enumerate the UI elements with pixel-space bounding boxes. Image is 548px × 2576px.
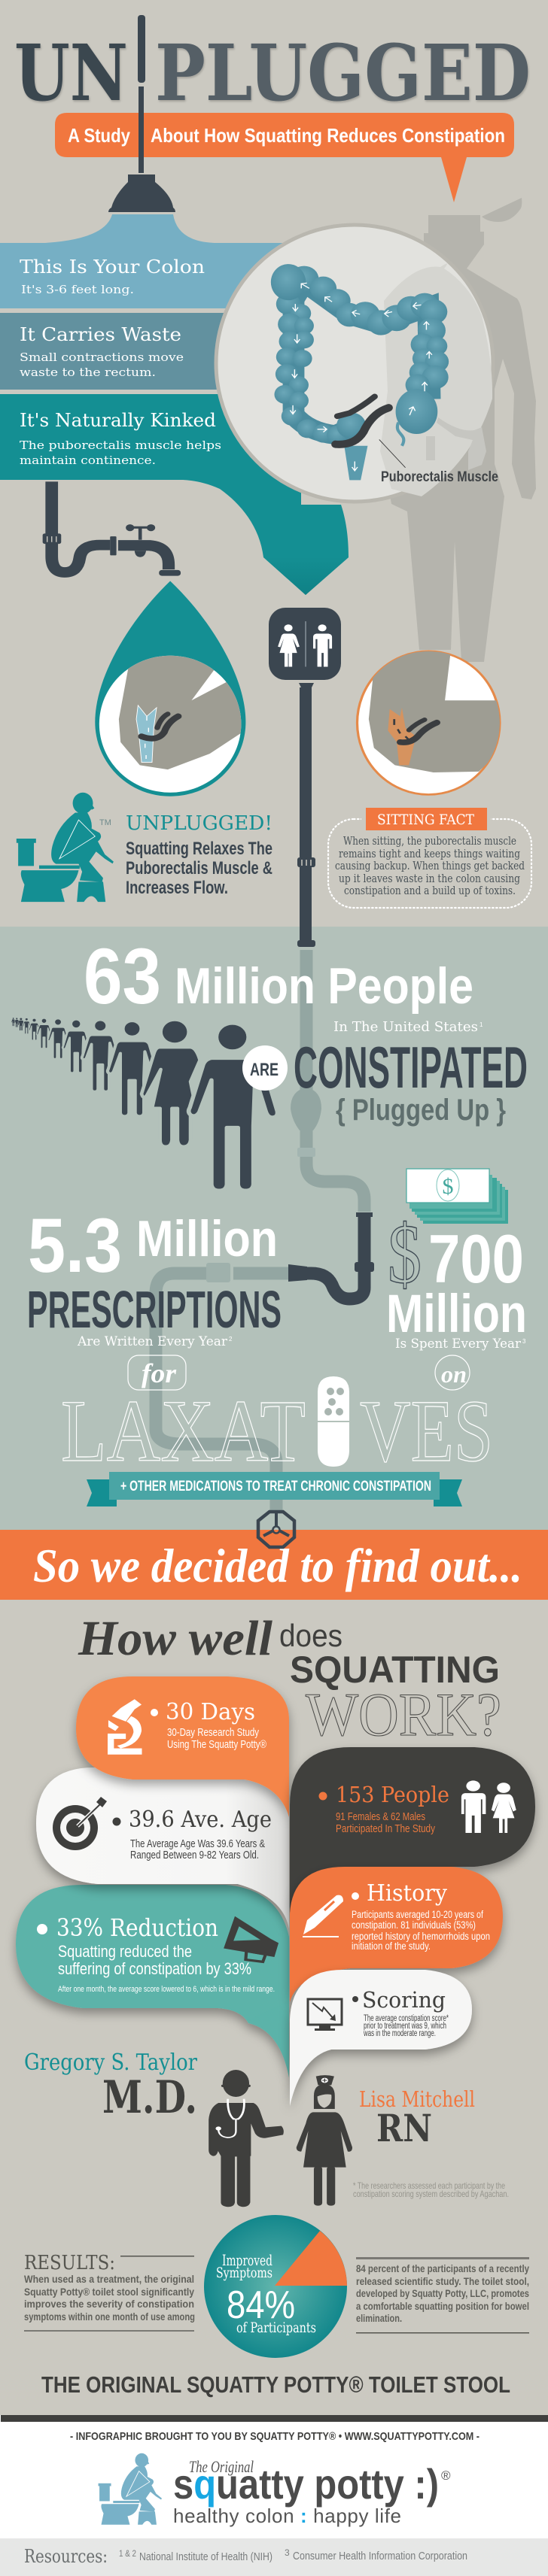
text: 153 people bbox=[336, 1810, 435, 1835]
label: puborectalis muscle: Puborectalis Muscle bbox=[381, 469, 498, 485]
text: average age: The Average Age Was 39.6 Years & bbox=[130, 1838, 265, 1850]
bubble: history bbox=[290, 1867, 503, 2002]
text: contractions: waste to the rectum. bbox=[20, 366, 156, 379]
footnote 2: 2 bbox=[229, 1336, 233, 1343]
text: contractions: Small contractions move bbox=[20, 350, 184, 364]
icon: valve wheel bbox=[258, 1512, 294, 1547]
heading: prescriptions: PRESCRIPTIONS bbox=[27, 1280, 282, 1339]
heading: laxatives: LAXAT bbox=[61, 1382, 306, 1480]
text: scoring bbox=[363, 2014, 449, 2038]
icon: monitor bbox=[308, 1999, 342, 2031]
results: right text bbox=[356, 2257, 529, 2333]
text: scoring: The average constipation score* bbox=[364, 2014, 449, 2023]
banner text: A Study bbox=[68, 124, 130, 147]
text: 153 people: Participated In The Study bbox=[336, 1822, 435, 1835]
pie value: 84 percent: 84% bbox=[227, 2283, 295, 2327]
ribbon: other medications bbox=[87, 1472, 462, 1506]
resources bar: National Institute of Health (NIH) bbox=[139, 2550, 272, 2563]
stat: 63 million people: 63 bbox=[84, 933, 161, 1021]
panel: carries waste bbox=[0, 313, 256, 390]
stat: 63 million people: Million People bbox=[175, 957, 473, 1015]
footer: brought to you by: - INFOGRAPHIC BROUGHT TO YOU BY SQUATTY POTTY® • WWW.SQUATTYPOTTY.COM - bbox=[70, 2430, 480, 2443]
heading: how well does squatting work: WORK? bbox=[306, 1680, 501, 1749]
pie chart: improved symptoms bbox=[204, 2215, 347, 2358]
results: right text: elimination. bbox=[356, 2312, 402, 2324]
pie label: improved symptoms: Symptoms bbox=[216, 2265, 272, 2281]
callout: unplugged bbox=[126, 812, 272, 898]
sitting anatomy circle bbox=[358, 650, 504, 794]
paragraph: sitting fact: up it leaves waste in the colon causing bbox=[339, 873, 520, 885]
icon: stack of money bbox=[406, 1169, 508, 1224]
text: squatting relaxes: Squatting Relaxes The bbox=[126, 839, 272, 859]
heading: how well does squatting work: How well bbox=[78, 1611, 273, 1666]
icon: nurse bbox=[297, 2075, 352, 2206]
resources bar: Consumer Health Information Corporation bbox=[293, 2550, 467, 2562]
logo tagline top: The Original bbox=[189, 2457, 254, 2476]
icon: stack of money: $ bbox=[443, 1174, 453, 1199]
trademark: TM bbox=[99, 818, 111, 827]
paragraph: sitting fact: constipation and a build up of toxins. bbox=[344, 885, 516, 897]
text: colon length: It's 3-6 feet long. bbox=[21, 283, 134, 296]
text: average age: Ranged Between 9-82 Years Old. bbox=[130, 1849, 259, 1861]
heading: sitting fact: SITTING FACT bbox=[377, 812, 474, 828]
pipe: dark trap bbox=[288, 1212, 374, 1299]
bubble: 153 people bbox=[290, 1747, 535, 1913]
icon: plunger bbox=[108, 15, 175, 212]
subtitle banner bbox=[55, 113, 514, 202]
text: 30 days bbox=[167, 1726, 266, 1751]
paragraph: results left: symptoms within one month of use among bbox=[24, 2311, 195, 2323]
resources bar bbox=[0, 2538, 548, 2576]
note: scoring system bbox=[353, 2180, 509, 2199]
panel: naturally kinked with arrow tail bbox=[0, 394, 349, 595]
icon: man and woman bbox=[461, 1780, 516, 1833]
icon: pill bbox=[318, 1376, 349, 1467]
text: plugged up: { Plugged Up } bbox=[336, 1094, 506, 1127]
bubble: average age bbox=[36, 1767, 289, 1928]
text: reduction: Squatting reduced the bbox=[58, 1942, 192, 1961]
icon: doctor bbox=[209, 2070, 284, 2207]
bullet bbox=[151, 1709, 158, 1716]
text: average age bbox=[130, 1838, 265, 1861]
text: reduction: suffering of constipation by 33% bbox=[58, 1959, 251, 1978]
pie label: of participants: of Participants bbox=[236, 2320, 316, 2336]
heading: it carries waste: It Carries Waste bbox=[20, 324, 181, 345]
panel: statistics background bbox=[0, 927, 548, 1530]
source one: 1 & 2 bbox=[119, 2548, 136, 2559]
heading: 153 people: 153 People bbox=[336, 1782, 449, 1807]
text: squatting relaxes: Puborectalis Muscle & bbox=[126, 858, 272, 878]
heading: naturally kinked: It's Naturally Kinked bbox=[20, 410, 216, 431]
bubble: reduction bbox=[16, 1885, 289, 2077]
heading: how well does squatting work: does bbox=[279, 1618, 342, 1653]
callout: are bbox=[242, 1045, 288, 1091]
text: history: initiation of the study. bbox=[352, 1940, 431, 1952]
text: reduction: After one month, the average score lowered to 6, which is in the mild range. bbox=[58, 1985, 275, 1994]
logo slogan: healthy colon : happy life bbox=[173, 2505, 401, 2527]
paragraph: results left: When used as a treatment, the original bbox=[24, 2273, 194, 2285]
title: UN bbox=[14, 28, 128, 119]
stat: 5.3 million prescriptions: 5.3 bbox=[28, 1203, 122, 1288]
text: contractions bbox=[20, 350, 184, 379]
icon: microscope bbox=[108, 1699, 142, 1755]
credit: lisa mitchell: Lisa Mitchell bbox=[359, 2086, 475, 2112]
pipe: faded upper run bbox=[291, 927, 364, 1212]
badge: on: on bbox=[441, 1361, 467, 1388]
text: in the united states: In The United States bbox=[333, 1019, 478, 1035]
credit: gregory taylor: Gregory S. Taylor bbox=[24, 2050, 198, 2076]
colon magnifier circle bbox=[216, 225, 493, 502]
text: reduction bbox=[58, 1942, 275, 1994]
pipe: faded lower run bbox=[156, 1263, 288, 1513]
icon: faucet and trap pipe bbox=[43, 481, 181, 576]
credit: gregory taylor bbox=[24, 2050, 198, 2124]
stat: 5.3 million prescriptions: Million bbox=[136, 1210, 278, 1267]
icon: megaphone bbox=[224, 1916, 279, 1962]
stat: 700 million: $ bbox=[388, 1208, 422, 1301]
heading: history: History bbox=[367, 1880, 447, 1907]
text: history: reported history of hemorrhoids upon bbox=[352, 1931, 490, 1942]
icon: squatting figure on toilet bbox=[17, 793, 114, 902]
icon: target bbox=[53, 1797, 107, 1850]
credit: gregory taylor: M.D. bbox=[102, 2071, 197, 2124]
credit: lisa mitchell: RN bbox=[376, 2106, 432, 2150]
text: is spent: Is Spent Every Year bbox=[395, 1337, 522, 1352]
heading: reduction: 33% Reduction bbox=[56, 1913, 218, 1942]
heading: resources: Resources: bbox=[24, 2546, 108, 2567]
footnote 3: 3 bbox=[522, 1338, 526, 1345]
callout: sitting fact bbox=[328, 805, 531, 908]
paragraph: results left: Squatty Potty® toilet stool significantly bbox=[24, 2286, 194, 2298]
icon: pencil bbox=[303, 1895, 343, 1937]
panel: blue colon heading bbox=[0, 214, 286, 308]
bubble: scoring bbox=[290, 1970, 472, 2106]
heading: laxatives: VES bbox=[360, 1382, 493, 1480]
heading: this is your colon: This Is Your Colon bbox=[20, 256, 205, 278]
paragraph: results left: improves the severity of constipation bbox=[24, 2298, 194, 2310]
heading: average age: 39.6 Ave. Age bbox=[129, 1807, 272, 1833]
heading: scoring: Scoring bbox=[362, 1987, 446, 2013]
callout: unplugged: UNPLUGGED! bbox=[126, 812, 272, 835]
text: scoring: was in the moderate range. bbox=[363, 2029, 436, 2038]
stat: 700 million bbox=[386, 1208, 527, 1352]
paragraph: sitting fact bbox=[335, 836, 525, 897]
results: left text: RESULTS: bbox=[24, 2252, 115, 2274]
heading: how well does squatting work bbox=[78, 1611, 501, 1749]
heading: 30 days: 30 Days bbox=[166, 1699, 255, 1725]
bubble: 30 days bbox=[76, 1676, 289, 1817]
ribbon: other medications: + OTHER MEDICATIONS TO TREAT CHRONIC CONSTIPATION bbox=[120, 1479, 431, 1494]
drop: squatting anatomy bbox=[95, 581, 245, 796]
text: puborectalis: maintain continence. bbox=[20, 454, 156, 467]
footer: white panel bbox=[0, 2415, 548, 2538]
stat: 700 million: 700 bbox=[428, 1221, 524, 1297]
man silhouette bbox=[388, 198, 536, 662]
text: 153 people: 91 Females & 62 Males bbox=[336, 1810, 425, 1823]
bullet bbox=[37, 1924, 47, 1934]
icon: queue of people bbox=[11, 1018, 277, 1191]
logo icon bbox=[99, 2453, 162, 2525]
text: squatting relaxes: Increases Flow. bbox=[126, 878, 228, 898]
text: 30 days: 30-Day Research Study bbox=[167, 1726, 259, 1739]
pie label: improved symptoms bbox=[216, 2251, 272, 2281]
bullet bbox=[352, 1996, 358, 2002]
source two: 3 bbox=[285, 2547, 290, 2558]
restroom sign and pipe bbox=[269, 608, 341, 936]
badge: for bbox=[128, 1355, 186, 1390]
paragraph: results left bbox=[24, 2273, 195, 2323]
heading: how well does squatting work: SQUATTING bbox=[290, 1649, 500, 1691]
callout: are: ARE bbox=[250, 1060, 279, 1080]
colon illustration bbox=[271, 264, 449, 480]
stat: 5.3 million prescriptions bbox=[27, 1203, 282, 1349]
registered mark: ® bbox=[441, 2468, 451, 2483]
text: history: constipation. 81 individuals (53%) bbox=[352, 1919, 476, 1931]
bullet bbox=[113, 1817, 120, 1826]
pie label: improved symptoms: Improved bbox=[222, 2251, 272, 2269]
badge: for: for bbox=[142, 1358, 177, 1388]
text: are written: Are Written Every Year bbox=[77, 1334, 228, 1349]
text: history: Participants averaged 10-20 years of bbox=[352, 1909, 483, 1920]
heading: laxatives bbox=[61, 1376, 493, 1480]
text: history bbox=[352, 1909, 490, 1952]
text: puborectalis: The puborectalis muscle helps bbox=[20, 438, 221, 452]
bullet bbox=[352, 1892, 359, 1900]
bullet bbox=[319, 1792, 327, 1801]
text: puborectalis bbox=[20, 438, 221, 467]
results: left text bbox=[24, 2252, 195, 2332]
footnote 1: 1 bbox=[480, 1021, 483, 1028]
footer: dark bar bbox=[1, 2415, 548, 2422]
text: 30 days: Using The Squatty Potty® bbox=[167, 1738, 266, 1751]
text: scoring: prior to treatment was 9, which bbox=[364, 2022, 446, 2031]
stat: 63 million people bbox=[84, 933, 483, 1035]
paragraph: sitting fact: When sitting, the puborectalis muscle bbox=[343, 836, 516, 848]
logo wordmark: squatty potty :) bbox=[173, 2460, 439, 2508]
credit: lisa mitchell bbox=[359, 2086, 475, 2150]
text: squatting relaxes bbox=[126, 839, 272, 898]
badge: on bbox=[435, 1355, 470, 1390]
logo: squatty potty bbox=[99, 2453, 451, 2527]
